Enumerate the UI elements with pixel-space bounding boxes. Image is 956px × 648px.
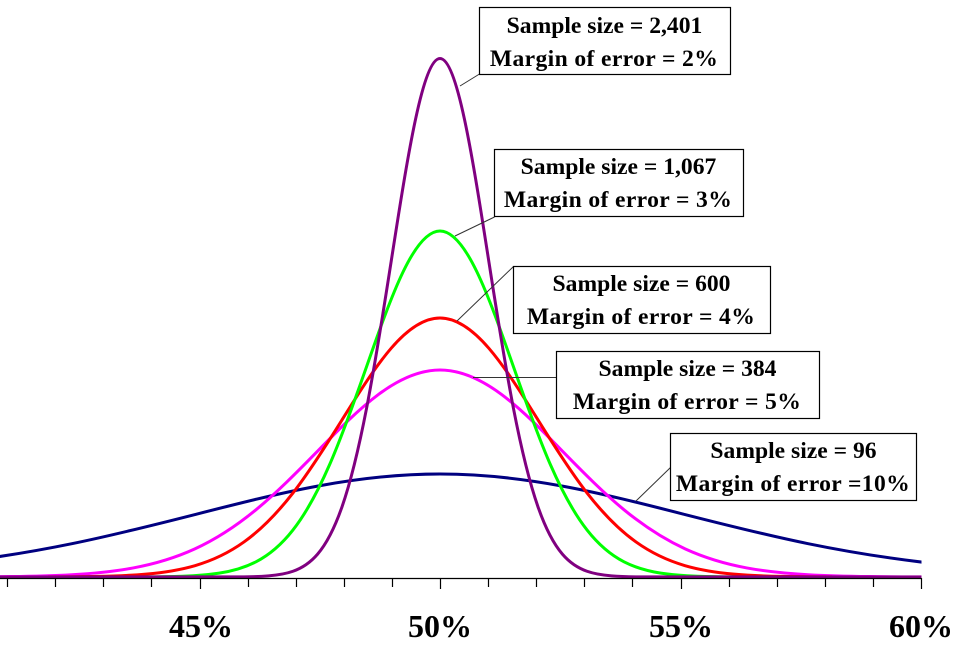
callout: sample size 384: Margin of error = 5% [573, 389, 801, 415]
callout: sample size 1,067 [455, 150, 744, 236]
label: 50%: 50% [408, 608, 472, 644]
label: 45%: 45% [169, 608, 233, 644]
curve: sample size 384 (magenta) [0, 370, 931, 577]
callout: sample size 1,067: Margin of error = 3% [504, 187, 732, 213]
curve: sample size 1,067 (green) [146, 231, 734, 577]
callout: sample size 600: Margin of error = 4% [527, 304, 755, 330]
callout: sample size 96 [636, 434, 916, 501]
callout: sample size 2,401: Margin of error = 2% [490, 46, 718, 72]
callout: sample size 600: Sample size = 600 [553, 271, 730, 297]
curve: sample size 2,401 (purple) [0, 58, 930, 577]
x axis with tick marks [0, 578, 922, 589]
callout: sample size 96: Margin of error =10% [676, 471, 910, 497]
callout: sample size 96: Sample size = 96 [710, 438, 877, 464]
label: 60%: 60% [889, 608, 953, 644]
callout: sample size 2,401 [460, 8, 730, 86]
callout: sample size 1,067: Sample size = 1,067 [521, 154, 717, 180]
callout: sample size 384: Sample size = 384 [599, 356, 777, 382]
callout: sample size 600 [457, 266, 770, 334]
callout: sample size 2,401: Sample size = 2,401 [507, 13, 702, 39]
curve: sample size 600 (red) [48, 318, 832, 577]
callout: sample size 384 [473, 352, 820, 418]
label: 55%: 55% [649, 608, 713, 644]
curve: sample size 96 (navy) [0, 472, 922, 564]
axis labels [169, 608, 953, 644]
